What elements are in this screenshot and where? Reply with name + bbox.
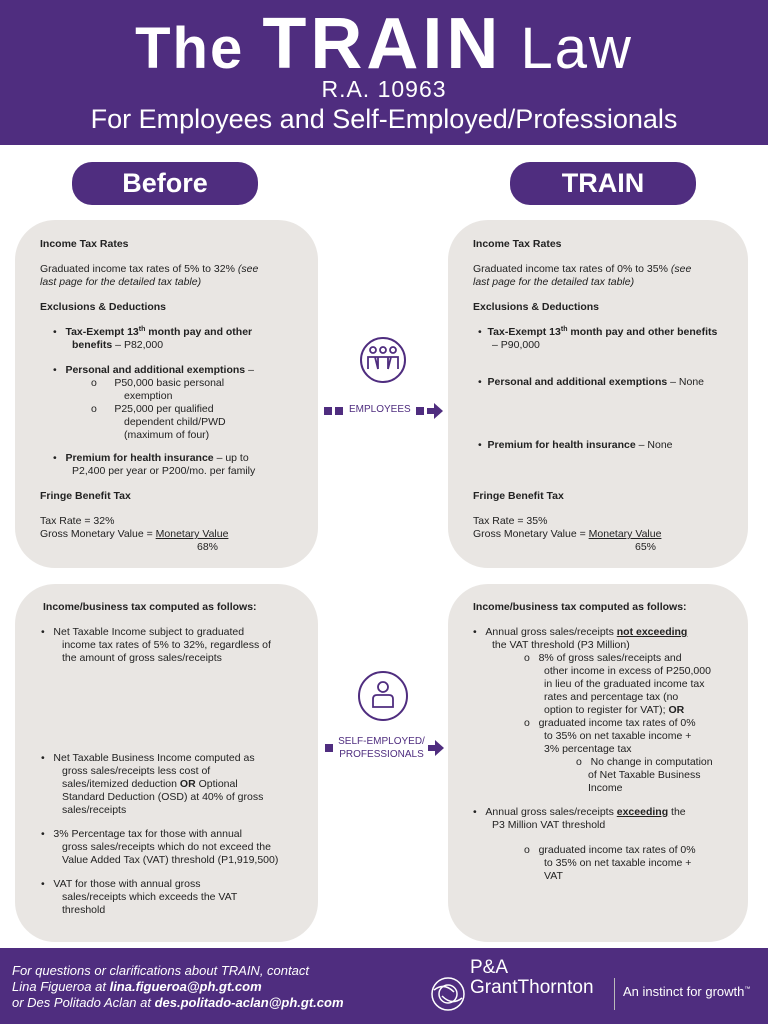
panel: before self-employed: threshold: [62, 904, 105, 916]
panel: before employees: P2,400 per year or P200/mo. per family: [72, 465, 255, 477]
panel: before self-employed: [15, 584, 318, 942]
panel: before self-employed: Income/business tax computed as follows:: [43, 601, 257, 613]
panel: TRAIN self-employed: to 35% on net taxable income +: [544, 857, 691, 869]
panel: before employees: Income Tax Rates: [40, 238, 129, 250]
contact text: Lina Figueroa at lina.figueroa@ph.gt.com: [12, 979, 262, 994]
panel: TRAIN self-employed: other income in excess of P250,000: [544, 665, 711, 677]
panel: before employees: Tax Rate = 32%: [40, 515, 114, 527]
arrow: employees: [324, 403, 443, 419]
contact text: For questions or clarifications about TRAIN, contact: [12, 963, 309, 978]
panel: TRAIN self-employed: o graduated income tax rates of 0%: [524, 844, 696, 856]
arrow: self-employed: PROFESSIONALS: [339, 749, 424, 760]
contact text: [12, 963, 344, 1010]
panel: before employees: Exclusions & Deductions: [40, 301, 166, 313]
icon: self-employed: [358, 671, 408, 721]
panel: before employees: [15, 220, 318, 568]
panel: TRAIN self-employed: 3% percentage tax: [544, 743, 632, 755]
panel: before employees: (maximum of four): [124, 429, 209, 441]
panel: before employees: Gross Monetary Value = Monetary Value: [40, 528, 228, 540]
panel: TRAIN employees: Tax Rate = 35%: [473, 515, 547, 527]
panel: before self-employed: the amount of gross sales/receipts: [62, 652, 222, 664]
panel: before employees: • Tax-Exempt 13th month pay and other: [53, 326, 252, 338]
panel: TRAIN employees: Gross Monetary Value = Monetary Value: [473, 528, 661, 540]
panel: TRAIN self-employed: o 8% of gross sales/receipts and: [524, 652, 682, 664]
panel: TRAIN employees: Graduated income tax rates of 0% to 35% (see: [473, 263, 691, 275]
panel: before employees: dependent child/PWD: [124, 416, 226, 428]
panel: TRAIN employees: last page for the detailed tax table): [473, 276, 634, 288]
logo: GrantThornton: [470, 977, 594, 998]
title: The TRAIN Law: [135, 4, 633, 84]
panel: TRAIN employees: Fringe Benefit Tax: [473, 490, 564, 502]
panel: before self-employed: • 3% Percentage tax for those with annual: [41, 828, 242, 840]
panel: before self-employed: income tax rates of 5% to 32%, regardless of: [62, 639, 271, 651]
panel: TRAIN employees: [448, 220, 748, 568]
panel: before employees: 68%: [197, 541, 218, 553]
panel: TRAIN self-employed: rates and percentage tax (no: [544, 691, 678, 703]
panel: before self-employed: Value Added Tax (VAT) threshold (P1,919,500): [62, 854, 278, 866]
panel: before employees: • Personal and additional exemptions –: [53, 364, 254, 376]
panel: TRAIN self-employed: • Annual gross sales/receipts not exceeding: [473, 626, 687, 638]
arrow: self-employed: SELF-EMPLOYED/: [338, 736, 425, 747]
panel: before employees: • Premium for health insurance – up to: [53, 452, 249, 464]
panel: before employees: exemption: [124, 390, 172, 402]
panel: TRAIN self-employed: Income: [588, 782, 622, 794]
panel: before self-employed: • VAT for those with annual gross: [41, 878, 201, 890]
footer: [0, 948, 768, 1024]
logo: An instinct for growth™: [623, 984, 750, 999]
panel: before self-employed: gross sales/receipts less cost of: [62, 765, 210, 777]
panel: before self-employed: sales/receipts: [62, 804, 126, 816]
panel: TRAIN employees: Income Tax Rates: [473, 238, 562, 250]
subtitle RA: R.A. 10963: [321, 76, 447, 102]
panel: before employees: Fringe Benefit Tax: [40, 490, 131, 502]
pill: Before: [72, 162, 258, 205]
panel: before employees: o P50,000 basic personal: [91, 377, 224, 389]
icon: employees: [360, 337, 406, 383]
panel: TRAIN self-employed: o No change in computation: [576, 756, 713, 768]
panel: TRAIN self-employed: o graduated income tax rates of 0%: [524, 717, 696, 729]
panel: TRAIN self-employed: VAT: [544, 870, 563, 882]
panel: TRAIN self-employed: • Annual gross sales/receipts exceeding the: [473, 806, 686, 818]
panel: before self-employed: sales/receipts which exceeds the VAT: [62, 891, 237, 903]
pill: TRAIN: TRAIN: [562, 168, 644, 198]
panel: TRAIN self-employed: P3 Million VAT threshold: [492, 819, 605, 831]
panel: TRAIN employees: Exclusions & Deductions: [473, 301, 599, 313]
contact text: or Des Politado Aclan at des.politado-aclan@ph.gt.com: [12, 995, 344, 1010]
panel: TRAIN self-employed: option to register for VAT); OR: [544, 704, 684, 716]
panel: before employees: last page for the detailed tax table): [40, 276, 201, 288]
panel: TRAIN self-employed: Income/business tax computed as follows:: [473, 601, 687, 613]
panel: TRAIN self-employed: to 35% on net taxable income +: [544, 730, 691, 742]
pill: TRAIN: [510, 162, 696, 205]
panel: TRAIN employees: • Premium for health insurance – None: [478, 439, 673, 451]
panel: before self-employed: • Net Taxable Income subject to graduated: [41, 626, 244, 638]
panel: before self-employed: Standard Deduction (OSD) at 40% of gross: [62, 791, 263, 803]
panel: before self-employed: • Net Taxable Business Income computed as: [41, 752, 255, 764]
panel: TRAIN self-employed: of Net Taxable Business: [588, 769, 700, 781]
arrow: employees: EMPLOYEES: [349, 404, 411, 415]
subtitle audience: For Employees and Self-Employed/Professionals: [91, 104, 677, 134]
panel: TRAIN employees: 65%: [635, 541, 656, 553]
panel: TRAIN self-employed: the VAT threshold (P3 Million): [492, 639, 630, 651]
panel: TRAIN self-employed: [448, 584, 748, 942]
panel: before employees: Graduated income tax rates of 5% to 32% (see: [40, 263, 258, 275]
panel: TRAIN employees: • Personal and additional exemptions – None: [478, 376, 704, 388]
panel: before self-employed: gross sales/receipts which do not exceed the: [62, 841, 271, 853]
logo: [431, 957, 750, 1011]
arrow: self-employed: [325, 736, 444, 760]
logo: P&A: [470, 957, 508, 978]
panel: TRAIN employees: • Tax-Exempt 13th month pay and other benefits: [478, 326, 717, 338]
panel: TRAIN employees: – P90,000: [492, 339, 540, 351]
panel: before self-employed: sales/itemized deduction OR Optional: [62, 778, 238, 790]
pill: Before: Before: [122, 168, 208, 198]
header: [0, 0, 768, 145]
panel: before employees: benefits – P82,000: [72, 339, 163, 351]
panel: before employees: o P25,000 per qualified: [91, 403, 214, 415]
panel: TRAIN self-employed: in lieu of the graduated income tax: [544, 678, 705, 690]
